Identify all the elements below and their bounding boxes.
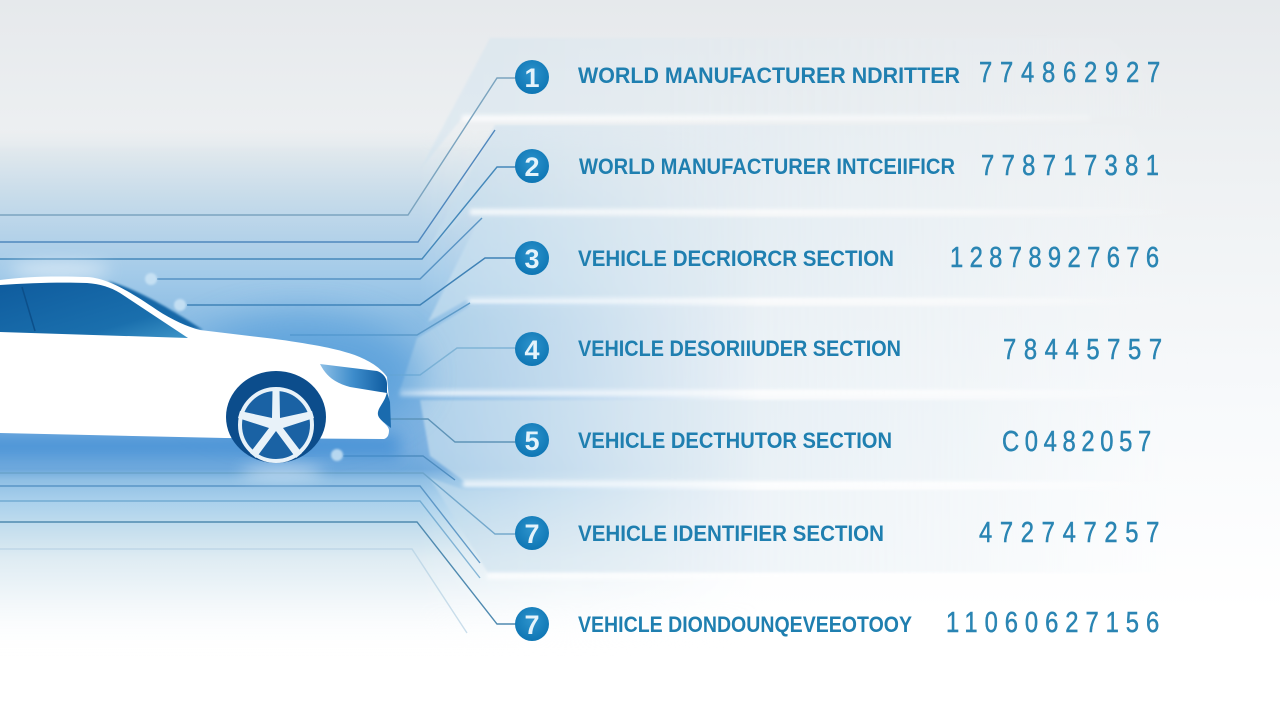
side window xyxy=(0,283,188,338)
row 7 xyxy=(515,606,1159,641)
code 2: 778717381 xyxy=(981,149,1159,182)
marker 5: 5 xyxy=(524,426,540,456)
headlight xyxy=(320,364,387,393)
marker 7 xyxy=(515,607,549,641)
marker 1 xyxy=(515,60,549,94)
row 4 xyxy=(515,332,1162,366)
code 4: 78445757 xyxy=(1003,333,1162,366)
label 5: VEHICLE DECTHUTOR SECTION xyxy=(578,428,892,453)
marker 6 xyxy=(515,516,549,550)
label 7: VEHICLE DIONDOUNQEVEEOTOOY xyxy=(578,612,912,637)
label 3: VEHICLE DECRIORCR SECTION xyxy=(578,246,894,271)
marker 4 xyxy=(515,332,549,366)
car xyxy=(0,276,391,463)
marker 6: 7 xyxy=(524,519,540,549)
code 6: 472747257 xyxy=(979,516,1159,549)
label 1: WORLD MANUFACTURER NDRITTER xyxy=(578,63,960,88)
marker 3 xyxy=(515,241,549,275)
window pillar xyxy=(22,287,35,331)
front grille xyxy=(378,392,391,428)
marker 3: 3 xyxy=(524,244,540,274)
windshield shadow xyxy=(108,281,203,330)
label 2: WORLD MANUFACTURER INTCEIIFICR xyxy=(579,154,955,179)
label 6: VEHICLE IDENTIFIER SECTION xyxy=(578,521,884,546)
marker 2: 2 xyxy=(524,152,540,182)
connector lines xyxy=(0,78,516,633)
row 3 xyxy=(515,241,1159,275)
code 1: 774862927 xyxy=(979,56,1160,89)
marker 1: 1 xyxy=(524,63,540,93)
marker 7: 7 xyxy=(524,610,540,640)
blue light band behind car xyxy=(0,146,732,613)
panel: row backgrounds xyxy=(400,38,1190,576)
row 5 xyxy=(515,423,1151,458)
code 7: 11060627156 xyxy=(946,606,1159,639)
row 1 xyxy=(515,56,1160,94)
wheel xyxy=(226,371,326,463)
car body xyxy=(0,276,389,439)
marker 2 xyxy=(515,149,549,183)
row 6 xyxy=(515,516,1159,550)
code 3: 12878927676 xyxy=(950,241,1159,274)
marker 5 xyxy=(515,423,549,457)
code 5: C0482057 xyxy=(1002,425,1151,458)
car glow xyxy=(0,263,420,477)
label 4: VEHICLE DESORIIUDER SECTION xyxy=(578,336,901,361)
marker 4: 4 xyxy=(524,335,540,365)
row 2 xyxy=(515,149,1159,183)
sensor dots xyxy=(145,273,343,461)
